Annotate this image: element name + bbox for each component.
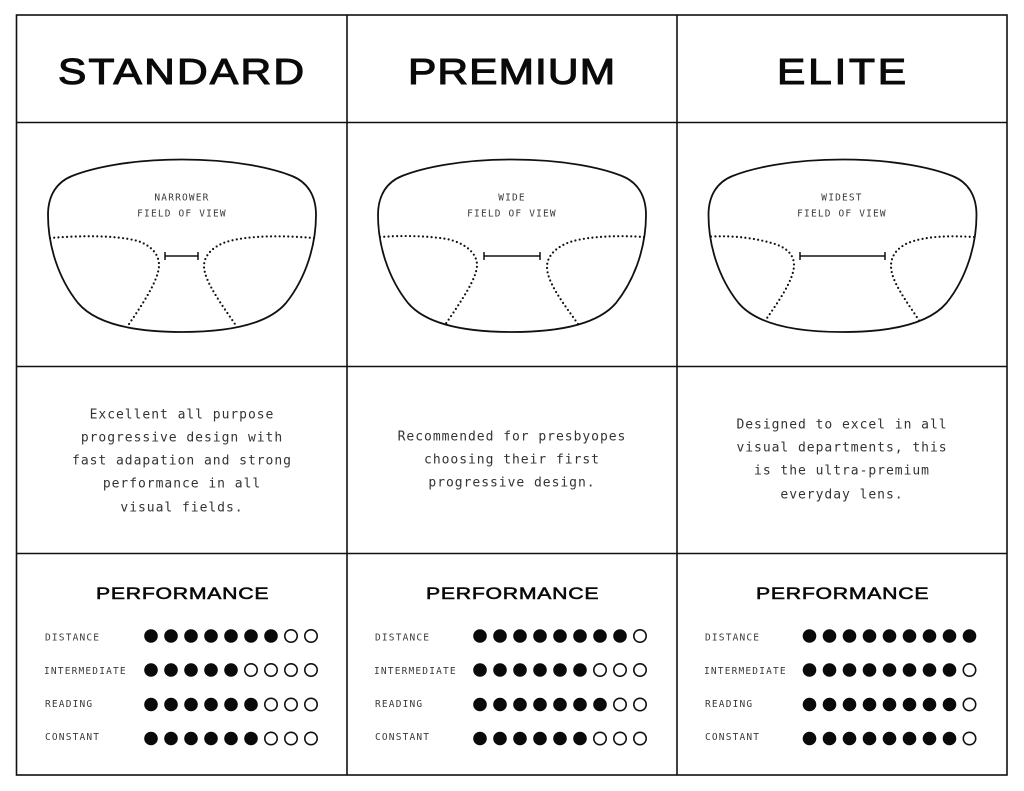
description: premium: progressive design. xyxy=(428,476,596,490)
lens outline xyxy=(708,160,976,332)
performance heading: PERFORMANCE xyxy=(96,585,268,603)
field of view label: WIDE xyxy=(498,192,526,204)
rating: intermediate 8 of 9 xyxy=(704,663,976,677)
rating: distance 9 of 9 xyxy=(705,629,976,644)
performance: premium xyxy=(374,585,646,745)
rating: intermediate 5 of 9: INTERMEDIATE xyxy=(44,666,127,677)
rating: constant 6 of 9 xyxy=(375,732,646,745)
field of view label: FIELD OF VIEW xyxy=(467,208,557,220)
right dotted zone xyxy=(204,236,314,327)
right dotted zone xyxy=(547,236,644,324)
description: standard: fast adapation and strong xyxy=(72,454,292,468)
field of view label: FIELD OF VIEW xyxy=(137,208,227,220)
left dotted zone xyxy=(50,236,159,327)
rating: constant 6 of 9: CONSTANT xyxy=(45,732,100,743)
lens diagram: elite xyxy=(708,160,976,332)
rating: distance 8 of 9 xyxy=(375,629,646,644)
rating: distance 8 of 9: DISTANCE xyxy=(375,632,430,644)
lens diagram: premium xyxy=(378,160,646,332)
lens diagram: standard xyxy=(48,160,316,332)
field of view label: FIELD OF VIEW xyxy=(797,208,887,220)
description: premium: choosing their first xyxy=(424,452,600,468)
performance: standard xyxy=(44,585,317,745)
performance heading: PERFORMANCE xyxy=(426,585,598,603)
rating: distance 7 of 9 xyxy=(45,629,317,644)
performance heading: PERFORMANCE xyxy=(756,585,928,603)
heading: elite: ELITE xyxy=(777,52,906,92)
corridor width bar xyxy=(165,252,198,260)
description: elite: is the ultra-premium xyxy=(754,464,930,478)
rating: distance 7 of 9: DISTANCE xyxy=(45,632,100,644)
left dotted zone xyxy=(711,236,794,321)
rating: intermediate 6 of 9: INTERMEDIATE xyxy=(374,666,457,677)
lens outline xyxy=(48,160,316,332)
column: elite xyxy=(704,52,976,745)
rating: reading 8 of 9: READING xyxy=(705,699,753,710)
description: standard: visual fields. xyxy=(120,500,244,516)
description: elite: everyday lens. xyxy=(780,488,904,502)
rating: reading 7 of 9 xyxy=(375,698,646,711)
rating: constant 6 of 9 xyxy=(45,732,317,745)
rating: reading 6 of 9 xyxy=(45,698,317,711)
rating: constant 8 of 9: CONSTANT xyxy=(705,732,760,743)
rating: reading 8 of 9 xyxy=(705,698,976,711)
rating: reading 6 of 9: READING xyxy=(45,699,93,710)
column: standard xyxy=(44,52,317,745)
rating: intermediate 6 of 9 xyxy=(374,663,646,677)
performance: elite xyxy=(704,585,976,745)
description: standard: performance in all xyxy=(103,476,261,492)
left dotted zone xyxy=(380,236,477,325)
lens outline xyxy=(378,160,646,332)
description: standard: Excellent all purpose xyxy=(90,408,274,422)
rating: distance 9 of 9: DISTANCE xyxy=(705,632,760,644)
description: standard: progressive design with xyxy=(81,430,283,446)
corridor width bar xyxy=(484,252,540,260)
rating: intermediate 8 of 9: INTERMEDIATE xyxy=(704,666,787,677)
corridor width bar xyxy=(800,252,885,260)
rating: constant 6 of 9: CONSTANT xyxy=(375,732,430,743)
field of view label: WIDEST xyxy=(821,192,863,204)
heading: premium: PREMIUM xyxy=(408,52,615,92)
right dotted zone xyxy=(891,236,974,322)
description: elite: Designed to excel in all xyxy=(736,418,948,432)
rating: intermediate 5 of 9 xyxy=(44,663,317,677)
description: premium: Recommended for presbyopes xyxy=(398,430,626,444)
description: elite: visual departments, this xyxy=(736,440,948,456)
rating: constant 8 of 9 xyxy=(705,732,976,745)
field of view label: NARROWER xyxy=(154,192,210,204)
column: premium xyxy=(374,52,646,745)
rating: reading 7 of 9: READING xyxy=(375,699,423,710)
heading: standard: STANDARD xyxy=(58,52,304,92)
